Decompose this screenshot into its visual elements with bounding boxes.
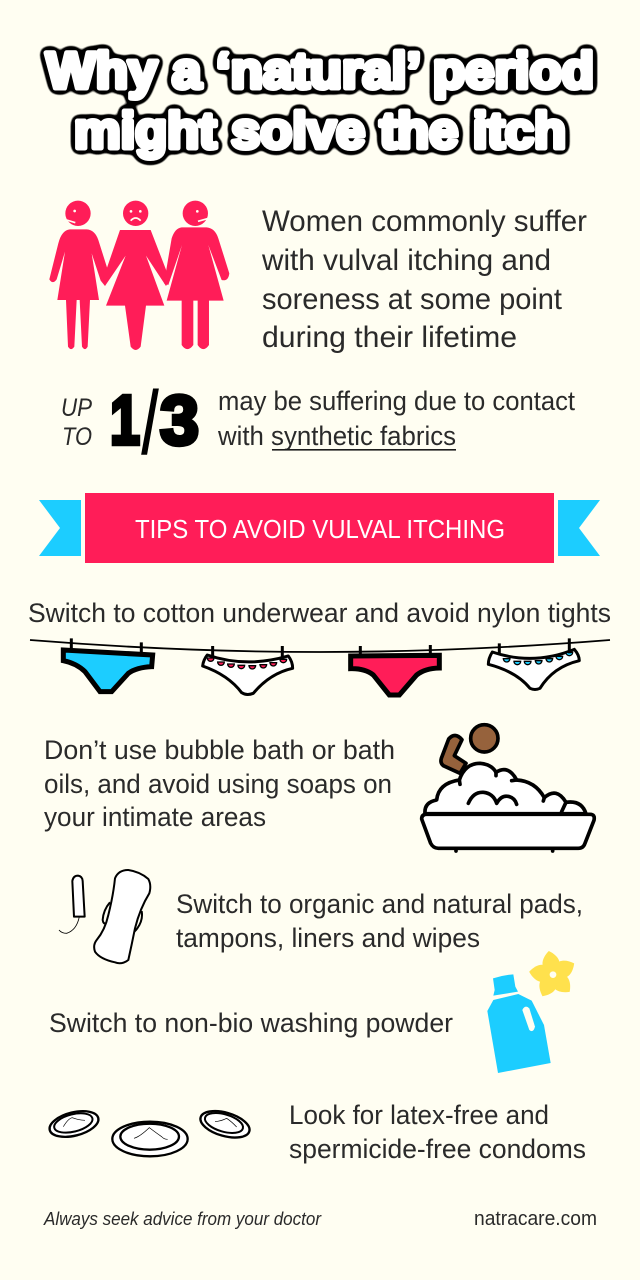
- statistic: one third: /: [142, 375, 159, 472]
- tip: organic pads: tampons, liners and wipes: [176, 923, 480, 953]
- intro text: [261, 205, 587, 354]
- right condom: [197, 1106, 253, 1143]
- middle condom: [112, 1122, 188, 1156]
- left condom: [47, 1107, 101, 1141]
- white briefs with pink lace: [203, 646, 293, 695]
- banner: tips heading: [39, 493, 600, 563]
- tip: condoms: spermicide-free condoms: [289, 1134, 586, 1164]
- tampon: [59, 876, 85, 933]
- icon: three women holding hands: [49, 201, 229, 350]
- middle woman: [103, 201, 170, 350]
- icon: yellow flower: [528, 950, 578, 1000]
- intro text: during their lifetime: [262, 321, 517, 354]
- tip: cotton underwear: Switch to cotton underwear and avoid nylon tights: [28, 598, 611, 628]
- statistic: one third: 1: [110, 381, 140, 459]
- icon: detergent bottle: [487, 974, 551, 1073]
- intro text: with vulval itching and: [261, 244, 551, 277]
- statistic: one third: 3: [160, 381, 199, 459]
- up to label: [61, 394, 92, 451]
- tip: condoms: Look for latex-free and: [289, 1100, 549, 1130]
- tip: bubble bath: Don’t use bubble bath or bath: [44, 735, 395, 765]
- white briefs with blue lace: [488, 638, 579, 689]
- intro text: soreness at some point: [262, 283, 563, 316]
- blue briefs: [63, 638, 153, 692]
- icon: washing line with underwear: [30, 638, 610, 695]
- right woman: [164, 201, 229, 349]
- pad: [94, 870, 150, 963]
- left woman: [49, 201, 108, 349]
- icon: person in bubble bath: [422, 725, 594, 851]
- contact text: [217, 386, 575, 451]
- footer note: Always seek advice from your doctor: [43, 1209, 322, 1229]
- icon: three condoms: [47, 1106, 253, 1156]
- statistic: one third: [110, 375, 199, 472]
- tip: bubble bath: your intimate areas: [44, 802, 266, 832]
- contact text: with synthetic fabrics: [217, 421, 456, 451]
- up to label: UP: [61, 394, 92, 422]
- tip: organic pads: [176, 889, 583, 953]
- title: might solve the itch: [74, 102, 566, 159]
- pink briefs: [351, 645, 439, 695]
- icon: tampon and pad: [59, 870, 150, 963]
- up to label: TO: [62, 423, 92, 451]
- footer website: natracare.com: [474, 1208, 597, 1230]
- intro text: Women commonly suffer: [262, 205, 587, 238]
- title: [46, 42, 594, 159]
- tip: bubble bath: [44, 735, 395, 832]
- tip: bubble bath: oils, and avoid using soaps on: [44, 769, 392, 799]
- title: Why a ‘natural’ period: [46, 42, 594, 99]
- banner: tips heading: TIPS TO AVOID VULVAL ITCHING: [135, 514, 505, 544]
- tip: washing powder: Switch to non-bio washing powder: [49, 1008, 453, 1038]
- tip: condoms: [289, 1100, 586, 1164]
- contact text: may be suffering due to contact: [218, 386, 575, 416]
- tip: organic pads: Switch to organic and natural pads,: [176, 889, 583, 919]
